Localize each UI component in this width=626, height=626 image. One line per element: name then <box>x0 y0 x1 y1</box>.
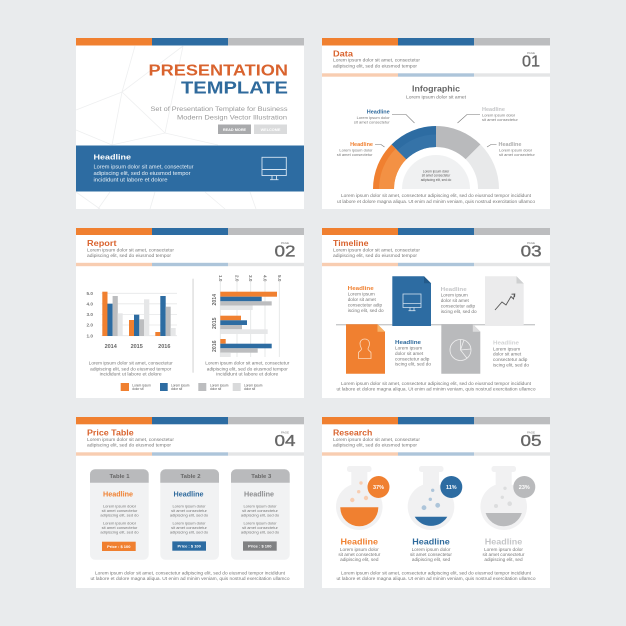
title: TEMPLATE <box>181 78 288 98</box>
header: research: adipiscing elit, sed do eiusmod tempor <box>333 442 417 447</box>
legend: dolor sit <box>210 387 221 391</box>
text: blue headline: Lorem ipsum dolor <box>412 547 451 552</box>
flask: gray 23%: 23% <box>519 485 530 491</box>
callout: gray headline: Lorem ipsum dolor <box>499 148 533 152</box>
text: blue headline: sit amet consectetur <box>410 552 452 557</box>
title: PRESENTATION <box>148 63 288 80</box>
card: table 2: Lorem ipsum dolor <box>172 503 206 508</box>
card: table 3: Lorem ipsum dolor <box>243 520 277 525</box>
footer text <box>336 571 536 581</box>
header: data: 01 <box>522 54 540 71</box>
callout: orange headline: Lorem ipsum dolor <box>339 148 373 152</box>
semicircle chart: adipiscing elit, sed do <box>421 178 451 182</box>
text: orange headline: sit amet consectetur <box>338 552 381 557</box>
bar chart: vertical: 2016 <box>158 344 170 350</box>
text: blue headline: Lorem ipsum <box>395 346 422 351</box>
subtitle <box>150 106 288 122</box>
button: read more <box>218 124 251 134</box>
callout: gray headline: sit amet consectetur <box>499 152 535 157</box>
card: table 2 <box>160 469 219 560</box>
card: table 3 <box>231 469 290 560</box>
card: table 3: adipiscing elit, sed do <box>241 529 280 534</box>
legend: dolor sit <box>244 387 255 391</box>
footer text <box>336 381 536 392</box>
bar chart: vertical: 5.0 <box>86 291 93 296</box>
callout: light gray headline: Headline <box>482 107 505 113</box>
footer text <box>90 571 290 581</box>
legend <box>121 383 263 391</box>
bar chart: horizontal: 2014 <box>212 294 218 306</box>
headline band: incididunt ut labore et dolore <box>94 178 168 184</box>
flask: orange 37%: 37% <box>373 485 384 491</box>
bar chart: vertical: 2014 <box>105 344 118 350</box>
header: report: PAGE <box>281 241 289 245</box>
text: right chart note: Lorem ipsum dolor sit amet, consectetur <box>205 361 290 366</box>
headline band: adipiscing elit, sed do eiusmod tempor <box>94 171 191 177</box>
text: light gray headline: dolor sit amet <box>441 298 470 303</box>
button: welcome: WELCOME <box>261 128 281 132</box>
header: research: PAGE <box>527 430 535 434</box>
text: orange headline: dolor sit amet <box>348 297 377 302</box>
card: table 2: Headline <box>174 491 204 498</box>
card: table 2: Price : $ 100 <box>178 544 202 549</box>
bar chart: vertical: 3.0 <box>86 312 93 317</box>
header: price table: adipiscing elit, sed do eiusmod tempor <box>87 442 171 447</box>
callout: light gray headline: sit amet consectetur <box>482 117 518 122</box>
card: table 2: adipiscing elit, sed do <box>170 512 209 517</box>
text: orange headline: Lorem ipsum dolor <box>340 547 379 552</box>
text: pale headline: dolor sit amet <box>493 352 522 357</box>
header: timeline <box>322 228 550 266</box>
card: table 1: sit amet consectetur <box>102 508 138 513</box>
text: left chart note: Lorem ipsum dolor sit amet, consectetur <box>89 361 173 366</box>
callout: light gray headline <box>458 107 518 123</box>
subtitle: Modern Design Vector Illustration <box>177 114 287 122</box>
footer text: ut labore et dolore magna aliqua. Ut enim ad minim veniam, quis nostrud exercitation ullamco <box>90 576 290 581</box>
card: table 1: adipiscing elit, sed do <box>100 512 139 517</box>
header: data: Data <box>333 49 354 58</box>
card: orange person document <box>346 324 385 374</box>
card: table 2: sit amet consectetur <box>171 508 208 513</box>
legend: Lorem ipsum <box>171 383 190 387</box>
semicircle chart: Lorem ipsum dolor <box>423 170 450 174</box>
header: timeline: adipiscing elit, sed do eiusmod tempor <box>333 253 417 258</box>
header: report: Report <box>87 239 117 248</box>
text: pale headline <box>493 340 529 367</box>
header: research <box>322 417 550 456</box>
footer text: ut labore et dolore magna aliqua. Ut enim ad minim veniam, quis nostrud exercitation ullamco <box>337 199 535 204</box>
header: research: Lorem ipsum dolor sit amet, consectetur <box>333 437 420 442</box>
text: orange headline <box>338 538 381 562</box>
card: table 1: Price : $ 100 <box>107 544 131 549</box>
card: table 1: Lorem ipsum dolor <box>103 503 137 508</box>
bar chart: horizontal: 4.0 <box>262 275 268 282</box>
card: table 2: sit amet consectetur <box>171 525 208 530</box>
card: gray chart document <box>485 276 524 326</box>
bar chart: horizontal: 2016 <box>212 340 218 352</box>
card: blue monitor document <box>392 276 431 326</box>
flask: gray 23% <box>480 466 535 530</box>
icon: monitor <box>262 157 286 180</box>
headline band <box>76 146 304 192</box>
header: price table: Lorem ipsum dolor sit amet, consectetur <box>87 437 174 442</box>
card: table 3: sit amet consectetur <box>242 508 279 513</box>
bar chart: horizontal: 2.0 <box>234 275 240 282</box>
card: table 3: Price : $ 100 <box>248 544 272 549</box>
text: orange headline: Headline <box>348 286 374 292</box>
text: orange headline: adipiscing elit, sed <box>340 557 379 562</box>
card: table 3: sit amet consectetur <box>242 525 279 530</box>
panel: research <box>322 417 550 588</box>
text: right chart note: adipiscing elit, sed do eiusmod tempor <box>207 366 288 371</box>
text: gray headline <box>483 538 525 562</box>
footer text: Lorem ipsum dolor sit amet, consectetur adipiscing elit, sed do eiusmod tempor incididunt <box>341 381 532 386</box>
header: research: 05 <box>520 433 542 450</box>
semicircle chart: sit amet consectetur <box>422 174 451 178</box>
flask: blue 11%: 11% <box>446 485 457 491</box>
card: table 2: Lorem ipsum dolor <box>172 520 206 525</box>
bar chart: vertical <box>86 291 177 350</box>
card: table 2: adipiscing elit, sed do <box>170 529 209 534</box>
text: blue headline: iscing elit, sed do <box>395 362 431 367</box>
text: pale headline: Headline <box>493 340 519 346</box>
text: blue headline <box>410 538 452 562</box>
panel: data <box>322 38 550 209</box>
footer text: Lorem ipsum dolor sit amet, consectetur adipiscing elit, sed do eiusmod tempor incididunt <box>341 571 532 576</box>
callout: blue headline <box>354 110 414 124</box>
panel: cover slide <box>76 38 304 209</box>
heading: infographic <box>406 83 467 100</box>
text: left chart note <box>89 361 173 377</box>
headline band: Headline <box>94 153 131 162</box>
header: data <box>322 38 550 77</box>
bar chart: vertical: 4.0 <box>86 302 93 306</box>
text: right chart note: incididunt ut labore et dolore <box>216 372 279 377</box>
flask: orange 37% <box>336 466 390 530</box>
header: price table <box>76 417 304 456</box>
callout: blue headline: Lorem ipsum dolor <box>357 115 390 120</box>
callout: light gray headline: Lorem ipsum dolor <box>482 112 516 118</box>
button: welcome <box>254 124 287 134</box>
header: data: Lorem ipsum dolor sit amet, consectetur <box>333 58 420 63</box>
legend: dolor sit <box>132 387 144 391</box>
text: left chart note: adipiscing elit, sed do eiusmod tempor <box>90 366 172 371</box>
flask: blue 11% <box>408 466 462 530</box>
footer text: ut labore et dolore magna aliqua. Ut enim ad minim veniam, quis nostrud exercitation ullamco <box>336 576 536 581</box>
card: gray pie document <box>441 324 480 374</box>
card: table 1: Headline <box>103 491 133 498</box>
text: gray headline: sit amet consectetur <box>483 552 525 557</box>
text: orange headline: Headline <box>341 538 379 547</box>
card: table 1: Table 1 <box>110 474 130 480</box>
bar chart: horizontal: 1.0 <box>218 275 223 282</box>
icon: pie outline <box>450 340 471 360</box>
header: timeline: PAGE <box>527 241 535 245</box>
text: blue headline: consectetur adip <box>395 356 430 361</box>
text: orange headline <box>348 286 384 313</box>
title <box>148 63 288 98</box>
text: blue headline <box>395 340 431 367</box>
button: read more: READ MORE <box>223 128 247 132</box>
text: light gray headline: iscing elit, sed do <box>441 309 477 314</box>
header: report <box>76 228 304 266</box>
card: table 1: Lorem ipsum dolor <box>103 520 137 525</box>
card: table 1: adipiscing elit, sed do <box>100 529 139 534</box>
text: light gray headline: consectetur adip <box>441 303 475 308</box>
header: price table: 04 <box>274 433 296 450</box>
panel: report <box>76 228 304 398</box>
text: left chart note: incididunt ut labore et dolore <box>100 372 162 377</box>
header: timeline: Timeline <box>333 239 369 248</box>
text: light gray headline: Headline <box>441 287 467 293</box>
header: report: Lorem ipsum dolor sit amet, consectetur <box>87 248 174 252</box>
header: report: 02 <box>274 243 296 260</box>
callout: blue headline: Headline <box>367 110 390 116</box>
card: table 3: Headline <box>244 491 274 498</box>
card: table 2: Table 2 <box>180 474 200 480</box>
text: orange headline: consectetur adip <box>348 303 382 308</box>
header: price table: PAGE <box>281 430 289 434</box>
text: gray headline: Headline <box>485 538 523 547</box>
panel: timeline <box>322 228 550 398</box>
text: blue headline: Headline <box>412 538 450 547</box>
text: blue headline: Headline <box>395 340 421 346</box>
card: table 3: Table 3 <box>251 474 271 480</box>
header: timeline: Lorem ipsum dolor sit amet, consectetur <box>333 248 420 252</box>
text: orange headline: Lorem ipsum <box>348 292 375 297</box>
text: pale headline: iscing elit, sed do <box>493 362 529 367</box>
header: data: PAGE <box>527 51 535 55</box>
icon: trend arrow <box>495 294 515 310</box>
footer text: Lorem ipsum dolor sit amet, consectetur adipiscing elit, sed do eiusmod tempor incididunt <box>95 571 286 576</box>
legend: Lorem ipsum <box>132 383 151 387</box>
top colour bar <box>76 38 304 46</box>
legend: Lorem ipsum <box>210 383 229 387</box>
card: table 3: Lorem ipsum dolor <box>243 503 277 508</box>
text: pale headline: consectetur adip <box>493 357 528 362</box>
bar chart: horizontal <box>212 275 282 357</box>
callout: orange headline <box>337 142 384 157</box>
callout: orange headline: sit amet consectetur <box>337 152 373 157</box>
header: research: Research <box>333 428 372 437</box>
footer text: ut labore et dolore magna aliqua. Ut enim ad minim veniam, quis nostrud exercitation ullamco <box>336 386 536 392</box>
subtitle: Set of Presentation Template for Business <box>150 106 288 113</box>
card: table 1 <box>90 469 149 560</box>
bar chart: horizontal: 5.0 <box>277 275 282 282</box>
panel: price table <box>76 417 304 588</box>
bar chart: horizontal: 2015 <box>212 317 218 329</box>
text: light gray headline <box>441 287 477 314</box>
heading: infographic: Infographic <box>412 83 460 93</box>
header: report: adipiscing elit, sed do eiusmod tempor <box>87 253 171 258</box>
text: gray headline: adipiscing elit, sed <box>484 557 523 562</box>
callout: orange headline: Headline <box>350 142 373 148</box>
bar chart: vertical: 2.0 <box>86 322 93 328</box>
card: table 3: adipiscing elit, sed do <box>241 512 280 517</box>
header: price table: Price Table <box>87 428 134 437</box>
text: blue headline: dolor sit amet <box>395 351 424 356</box>
callout: gray headline <box>487 142 535 157</box>
icon: person outline <box>358 339 371 358</box>
icon: monitor outline <box>403 294 421 311</box>
header: data: adipiscing elit, sed do eiusmod tempor <box>333 63 417 68</box>
legend: dolor sit <box>171 387 182 391</box>
legend: Lorem ipsum <box>244 383 263 387</box>
text: right chart note <box>205 361 290 377</box>
text: orange headline: iscing elit, sed do <box>348 308 384 313</box>
bar chart: horizontal: 3.0 <box>248 275 253 282</box>
headline band: Lorem ipsum dolor sit amet, consectetur <box>94 164 194 170</box>
card: table 1: sit amet consectetur <box>102 525 138 530</box>
semicircle chart <box>373 126 499 189</box>
footer text: Lorem ipsum dolor sit amet, consectetur adipiscing elit, sed do eiusmod tempor incididunt <box>341 193 532 198</box>
heading: infographic: Lorem ipsum dolor sit amet <box>406 94 467 100</box>
callout: blue headline: sit amet consectetur <box>354 120 390 124</box>
header: timeline: 03 <box>521 243 542 260</box>
text: light gray headline: Lorem ipsum <box>441 293 468 298</box>
text: gray headline: Lorem ipsum dolor <box>484 547 523 552</box>
footer text <box>337 193 535 204</box>
bar chart: vertical: 1.0 <box>86 333 93 338</box>
bar chart: vertical: 2015 <box>131 344 143 350</box>
text: blue headline: adipiscing elit, sed <box>412 557 451 562</box>
text: pale headline: Lorem ipsum <box>493 346 520 351</box>
callout: gray headline: Headline <box>498 142 521 148</box>
